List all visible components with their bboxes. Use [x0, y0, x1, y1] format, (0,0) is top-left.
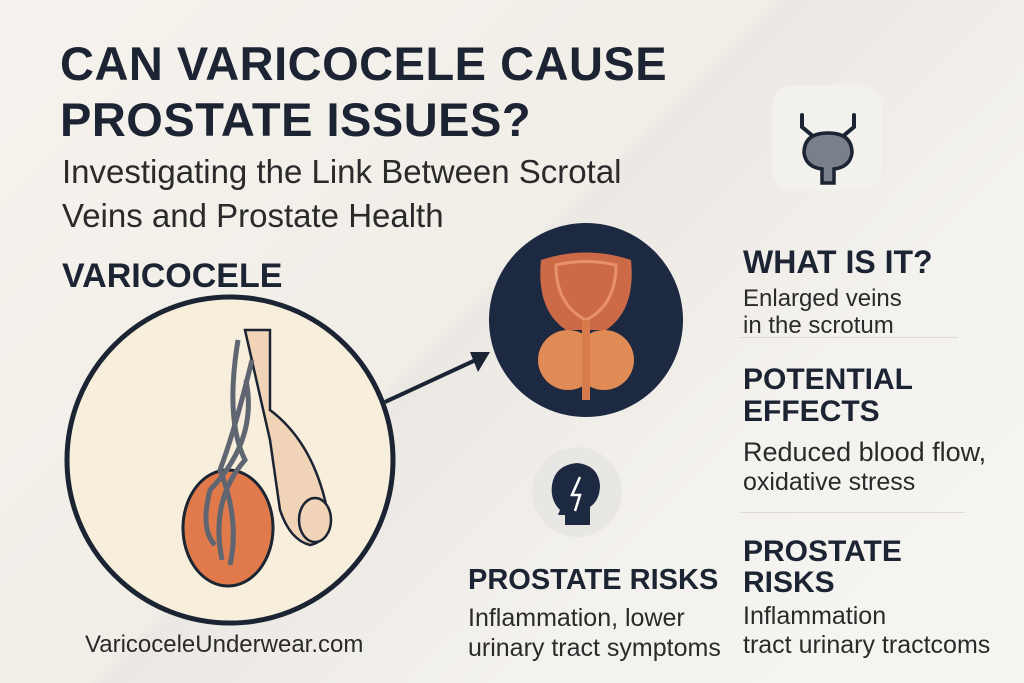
panel: prostate risks right: tract urinary tractcoms	[743, 631, 990, 659]
icon: prostate in dark circle	[489, 223, 683, 417]
block: prostate risks center: urinary tract symptoms	[468, 634, 721, 662]
icon: head with lightning	[536, 451, 622, 537]
title: CAN VARICOCELE CAUSE	[60, 37, 667, 90]
panel: prostate risks right: RISKS	[743, 566, 835, 599]
icon: bladder	[772, 85, 856, 185]
subtitle: Investigating the Link Between Scrotal	[62, 153, 622, 190]
panel: potential effects: POTENTIAL	[743, 363, 913, 396]
panel: potential effects: EFFECTS	[743, 395, 880, 428]
panel: what is it	[743, 244, 933, 339]
panel: what is it: Enlarged veins	[743, 285, 902, 312]
panel: prostate risks right	[743, 535, 990, 659]
panel: potential effects: Reduced blood flow,	[743, 437, 986, 467]
block: prostate risks center	[468, 564, 721, 662]
panel: what is it: WHAT IS IT?	[743, 244, 933, 280]
illustration: varicocele circle	[64, 294, 396, 626]
title	[60, 37, 667, 146]
panel: prostate risks right: PROSTATE	[743, 535, 902, 568]
block: prostate risks center: Inflammation, lower	[468, 604, 685, 632]
panel: prostate risks right: Inflammation	[743, 602, 886, 630]
title: PROSTATE ISSUES?	[60, 93, 531, 146]
subtitle: Veins and Prostate Health	[62, 197, 444, 234]
url: VaricoceleUnderwear.com	[85, 631, 363, 658]
heading: varicocele: VARICOCELE	[62, 257, 282, 295]
panel: potential effects	[743, 363, 986, 496]
subtitle	[62, 153, 622, 234]
panel: what is it: in the scrotum	[743, 312, 894, 339]
arrow	[384, 352, 490, 404]
panel: potential effects: oxidative stress	[743, 468, 915, 496]
block: prostate risks center: PROSTATE RISKS	[468, 564, 718, 596]
